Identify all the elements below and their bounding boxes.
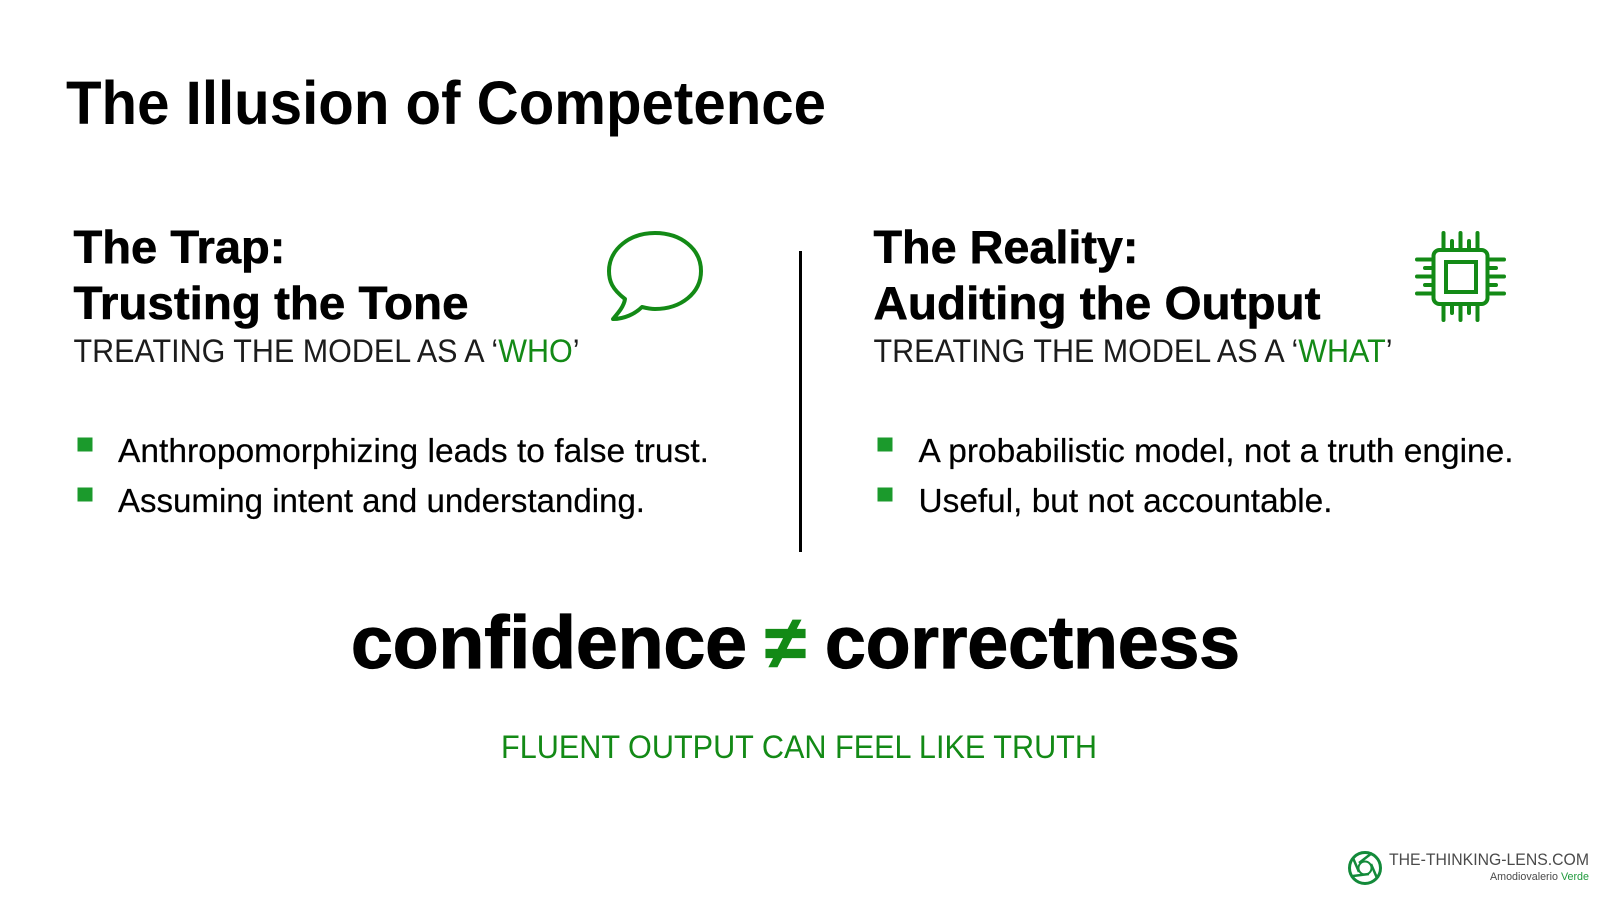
key message: confidence is not correctness bbox=[351, 601, 1240, 684]
panel: the trap bbox=[74, 221, 709, 519]
tagline: FLUENT OUTPUT CAN FEEL LIKE TRUTH bbox=[501, 729, 1097, 765]
heading: the trap bbox=[74, 221, 468, 329]
subheading: who: TREATING THE MODEL AS A ‘WHO’ bbox=[74, 333, 580, 369]
icon: microchip bbox=[1417, 233, 1504, 320]
bullet list: trap: Anthropomorphizing leads to false trust. bbox=[118, 432, 709, 469]
bullet list: reality: Useful, but not accountable. bbox=[918, 482, 1332, 519]
key message: confidence is not correctness: confidence bbox=[351, 601, 747, 684]
bullet list: reality bbox=[878, 432, 1514, 519]
heading: the reality: The Reality: bbox=[874, 221, 1138, 273]
subheading: what: TREATING THE MODEL AS A ‘WHAT’ bbox=[874, 333, 1392, 369]
key message: confidence is not correctness: correctness bbox=[825, 601, 1240, 684]
divider bbox=[799, 251, 802, 552]
heading: the trap: The Trap: bbox=[74, 221, 286, 273]
key message: confidence is not correctness: ≠ bbox=[765, 601, 806, 684]
bullet list: trap bbox=[78, 432, 709, 519]
heading: the trap: Trusting the Tone bbox=[74, 277, 468, 329]
logo text: THE-THINKING-LENS.COM bbox=[1389, 850, 1589, 869]
icon: lens aperture bbox=[1350, 852, 1380, 884]
heading: the reality: Auditing the Output bbox=[874, 277, 1320, 329]
panel: the reality bbox=[874, 221, 1514, 519]
heading: the reality bbox=[874, 221, 1320, 329]
bullet list: reality: A probabilistic model, not a truth engine. bbox=[918, 432, 1514, 469]
icon: speech bubble bbox=[609, 233, 701, 319]
logo author: Amodiovalerio Verde bbox=[1490, 871, 1589, 883]
logo: the thinking lens bbox=[1350, 850, 1589, 884]
bullet list: trap: Assuming intent and understanding. bbox=[118, 482, 645, 519]
title: The Illusion of Competence bbox=[66, 69, 826, 137]
